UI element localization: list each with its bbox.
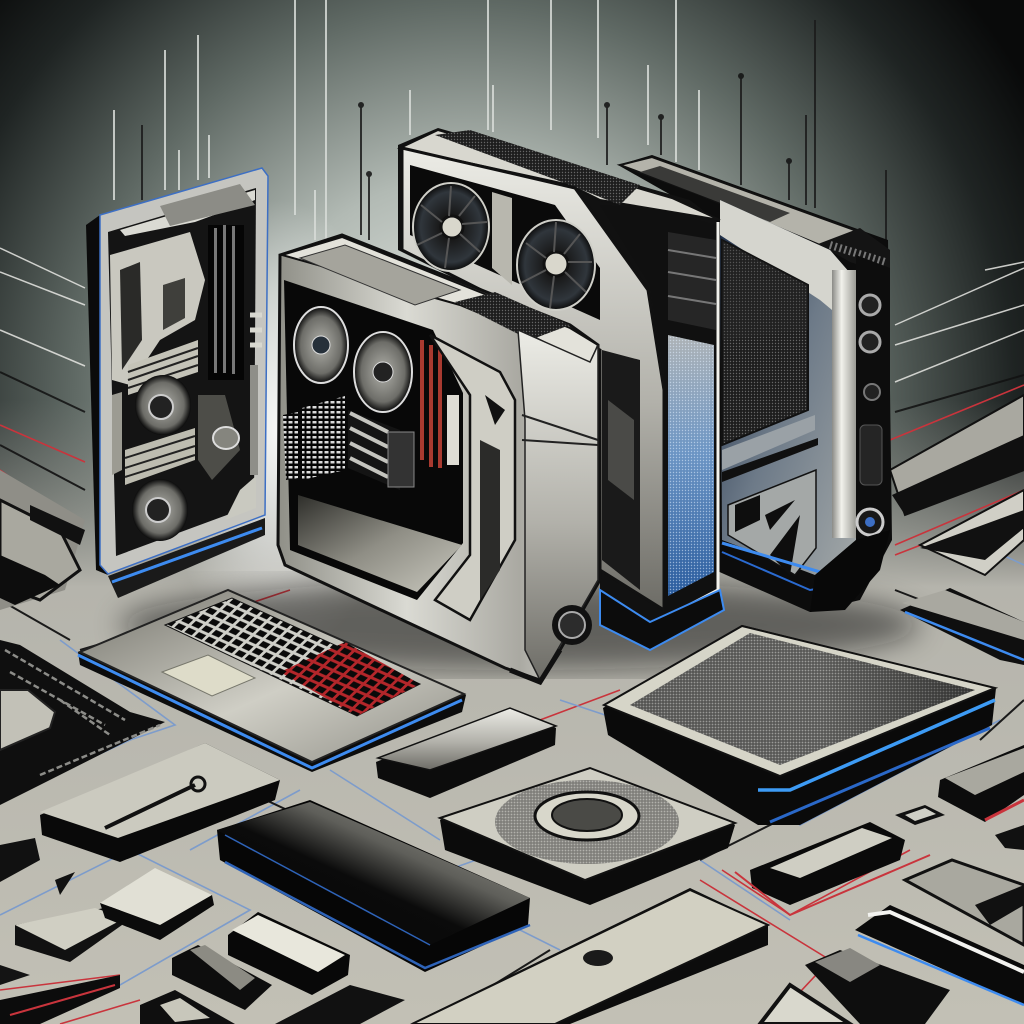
slim plate with slot (40, 743, 280, 862)
drawing tablet (603, 625, 996, 825)
shadow under hardware (120, 580, 920, 670)
lower long plate (410, 888, 768, 1024)
USB modules lower left (140, 912, 405, 1024)
case fan left (294, 307, 348, 383)
board fan bottom (132, 479, 188, 541)
blue mesh strip (668, 335, 714, 596)
external drive small (376, 708, 556, 798)
side streak lines (0, 248, 1024, 412)
laptop (78, 590, 466, 772)
panel: central PC case (278, 235, 600, 682)
case fan right (354, 332, 412, 412)
floor circuit traces (0, 385, 1024, 1024)
side bracket (430, 335, 515, 620)
panel: motherboard (86, 168, 268, 598)
keyboard (165, 598, 420, 716)
fan left (413, 183, 489, 271)
panel: GPU tower (398, 128, 724, 650)
board fan top (135, 375, 191, 435)
red RAM (420, 340, 442, 468)
panel: right floor components (760, 395, 1024, 1024)
panel: left floor components (0, 470, 214, 1024)
heatsink frame (110, 232, 205, 385)
black SSD right (735, 822, 930, 915)
silver side bar (832, 270, 856, 538)
fan right (517, 220, 595, 310)
panel: back right tower (618, 155, 892, 612)
side port column (856, 255, 890, 560)
black hard case (217, 800, 530, 972)
power button (552, 605, 592, 645)
vertical signal lines (114, 0, 886, 240)
interior window (284, 280, 463, 600)
RAM slots (208, 225, 244, 380)
round-speaker drive (440, 768, 735, 905)
